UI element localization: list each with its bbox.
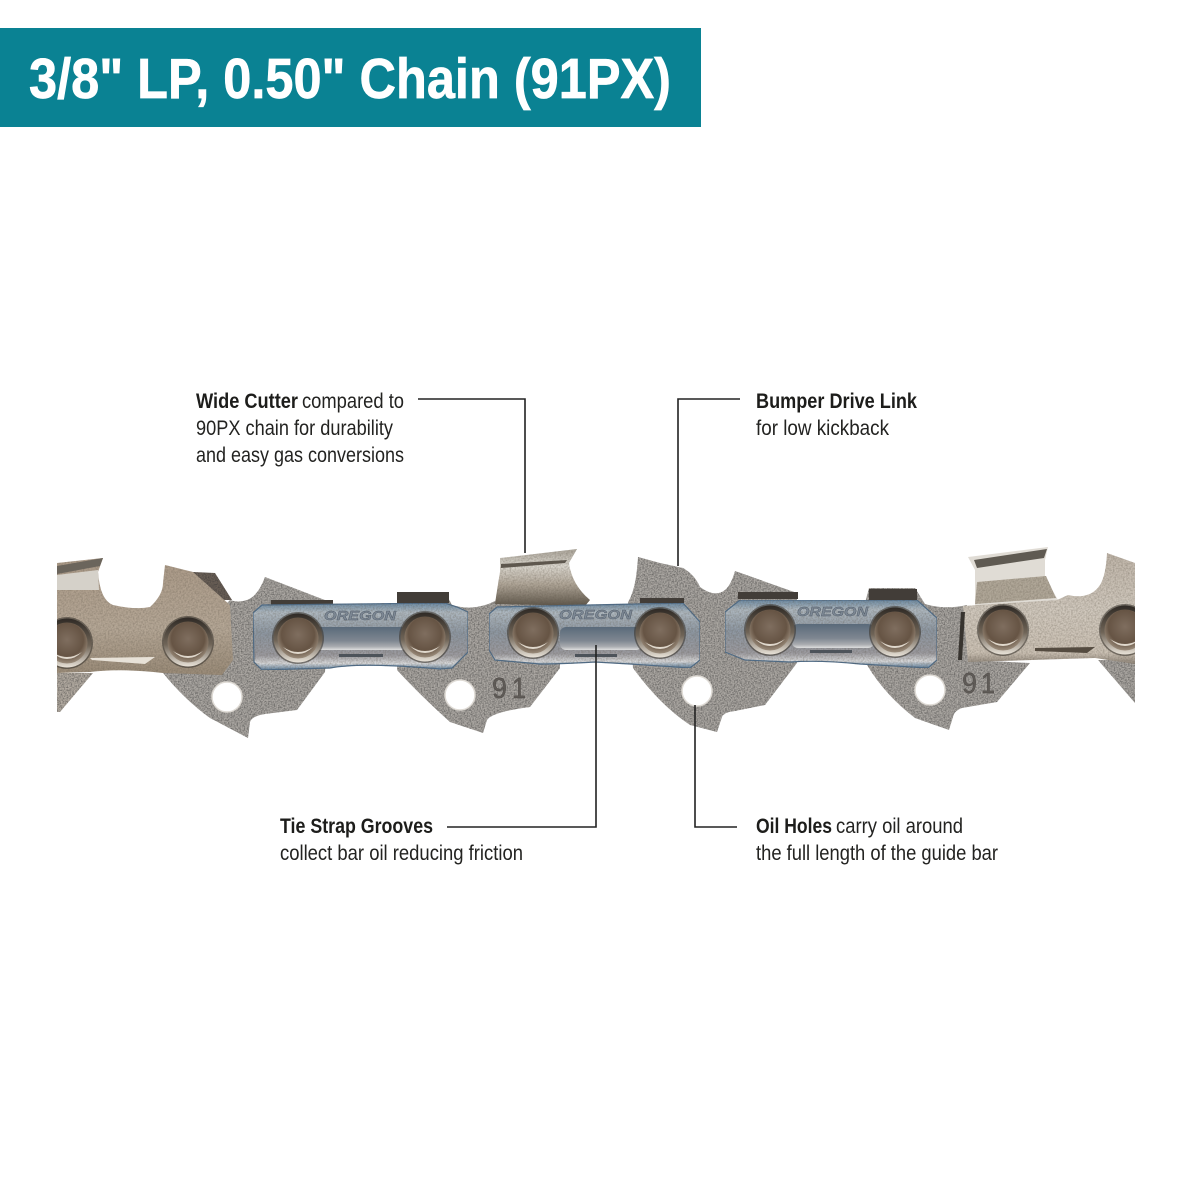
callout: oil holes: carry oil around [836, 815, 963, 838]
callout: wide cutter: Wide Cutter [196, 390, 298, 413]
callout: bumper drive link: for low kickback [756, 417, 889, 440]
gauge numbers stamped on drive links: 9 [492, 673, 507, 705]
rivets [41, 604, 1151, 669]
gauge numbers stamped on drive links [493, 672, 994, 698]
cutter: right [958, 547, 1135, 664]
gauge numbers stamped on drive links: 1 [512, 673, 526, 705]
callout: oil holes [756, 815, 998, 865]
leader line: wide cutter [418, 399, 525, 553]
callout: wide cutter [196, 390, 404, 467]
callout: wide cutter: 90PX chain for durability [196, 417, 393, 440]
title banner [0, 28, 701, 127]
callout: tie strap grooves: collect bar oil reducing friction [280, 842, 523, 865]
tie strap: centre [489, 603, 700, 668]
tie strap: centre: OREGON [559, 607, 633, 622]
tie strap: right [725, 600, 937, 668]
cutter: left [57, 558, 233, 675]
tie strap: left: OREGON [324, 608, 397, 623]
leader line: bumper drive link [678, 399, 740, 566]
callout: bumper drive link: Bumper Drive Link [756, 390, 917, 413]
callout: oil holes: Oil Holes [756, 815, 832, 838]
callout: wide cutter: and easy gas conversions [196, 444, 404, 467]
callout: bumper drive link [756, 390, 917, 440]
tie strap: left [253, 603, 468, 670]
leader line: oil holes [695, 705, 737, 827]
oil holes [212, 675, 945, 712]
leader line: tie strap grooves [447, 645, 596, 827]
tie strap: right: OREGON [797, 604, 869, 619]
drive links [57, 557, 1135, 738]
dark shoulder shadows on drive links [271, 589, 917, 605]
gauge numbers stamped on drive links: 1 [981, 668, 995, 700]
callout: wide cutter: compared to [302, 390, 404, 413]
cutter: centre [495, 549, 590, 606]
callout: tie strap grooves [280, 815, 523, 865]
callout: oil holes: the full length of the guide bar [756, 842, 998, 865]
title text: 3/8" LP, 0.50" Chain (91PX) [29, 47, 671, 111]
gauge numbers stamped on drive links: 9 [962, 668, 977, 700]
callout: tie strap grooves: Tie Strap Grooves [280, 815, 433, 838]
chain photograph illustration [41, 547, 1151, 738]
